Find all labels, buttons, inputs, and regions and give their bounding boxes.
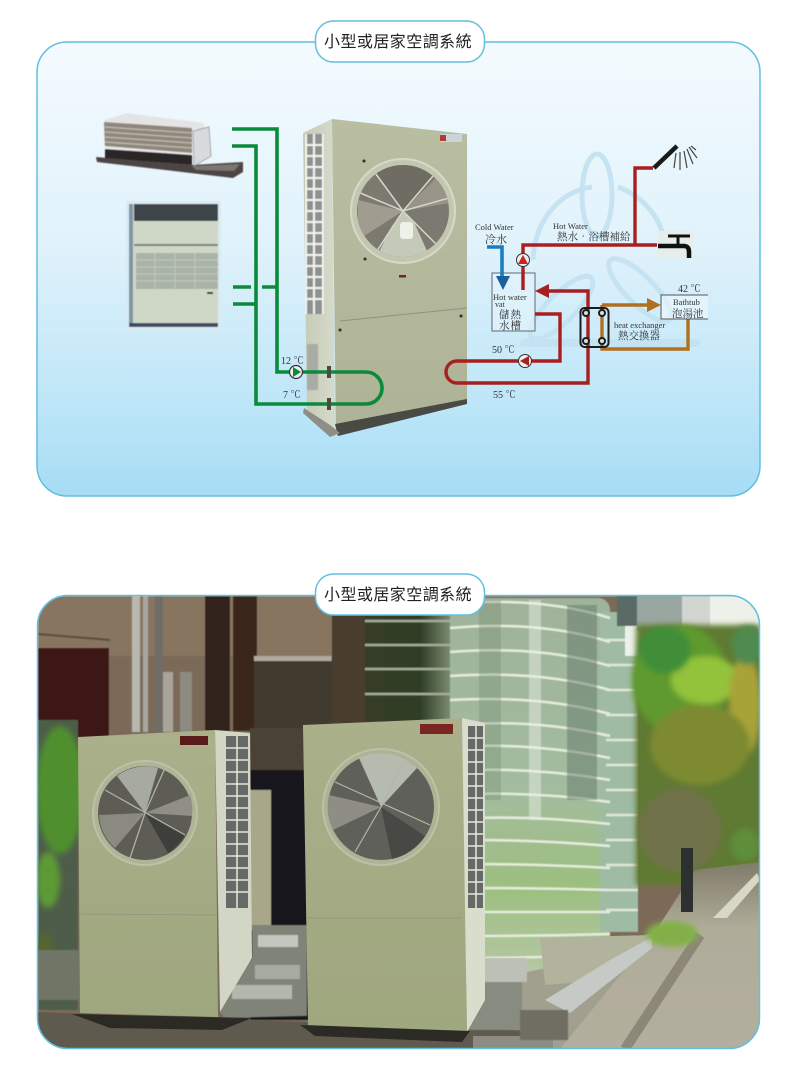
heading pill: panel 2: 小型或居家空調系統 xyxy=(324,586,472,604)
heat exchanger xyxy=(580,308,608,347)
outdoor heat pump unit xyxy=(303,119,467,437)
heading pill: panel 1: 小型或居家空調系統 xyxy=(324,33,472,51)
tank label: vat: vat xyxy=(495,300,506,309)
icon: tap xyxy=(657,231,693,258)
brand badge xyxy=(440,134,462,142)
pipe fittings between units xyxy=(38,925,568,1040)
heading pill: panel 2 xyxy=(316,574,484,615)
icon: shower xyxy=(654,146,697,170)
tank label: storage: 儲熱 xyxy=(499,308,522,321)
fan xyxy=(351,159,455,263)
pump: tank supply xyxy=(516,254,530,266)
water tanks xyxy=(332,598,638,983)
ground and walkway xyxy=(38,625,760,1049)
bathtub xyxy=(661,295,708,319)
side grille xyxy=(306,134,323,390)
watermark logo xyxy=(520,154,700,347)
arrow: into tank xyxy=(535,284,549,298)
label: bathtub: Bathtub xyxy=(673,297,700,307)
lamp post xyxy=(681,848,693,912)
label: heat exchanger: heat exchanger xyxy=(614,320,665,330)
indoor unit: ducted fan coil xyxy=(96,113,243,178)
panel: system diagram xyxy=(37,42,760,496)
bamboo leaves xyxy=(38,724,79,980)
label: cold water zh: 冷水 xyxy=(485,232,507,246)
air conditioner unit 2 xyxy=(300,718,485,1042)
label: cold water: Cold Water xyxy=(475,222,514,232)
orange pipes xyxy=(602,298,688,349)
label: 12 C: 12 ℃ xyxy=(281,355,304,367)
panel: installation photo xyxy=(34,596,764,1049)
label: 55 C: 55 ℃ xyxy=(493,389,516,401)
pump: chilled water xyxy=(290,366,302,378)
label: 42 C: 42 ℃ xyxy=(678,283,700,295)
tank label: Hot water xyxy=(493,292,527,302)
cold water pipe xyxy=(487,247,510,290)
label: heat exchanger zh: 熱交換器 xyxy=(618,329,660,342)
indoor unit: floor standing xyxy=(126,201,221,331)
palm foliage xyxy=(632,625,764,947)
pump: return xyxy=(518,354,532,368)
label: 7 C: 7 ℃ xyxy=(283,389,300,401)
chilled water pipes xyxy=(232,129,382,410)
label: hot water: Hot Water xyxy=(553,221,588,231)
label: bathtub zh: 泡湯池 xyxy=(672,307,704,320)
heading pill: panel 1 xyxy=(316,21,484,62)
label: 50 C: 50 ℃ xyxy=(492,344,514,356)
hot water tank xyxy=(492,273,535,331)
label: hot water zh: 熱水．浴槽補給 xyxy=(557,230,631,243)
base rail xyxy=(335,399,467,436)
photo background xyxy=(38,596,760,1048)
air conditioner unit 1 xyxy=(72,730,252,1030)
hot water pipes xyxy=(446,168,657,383)
tank label: water tank: 水槽 xyxy=(499,319,522,332)
sky and buildings xyxy=(617,596,760,656)
